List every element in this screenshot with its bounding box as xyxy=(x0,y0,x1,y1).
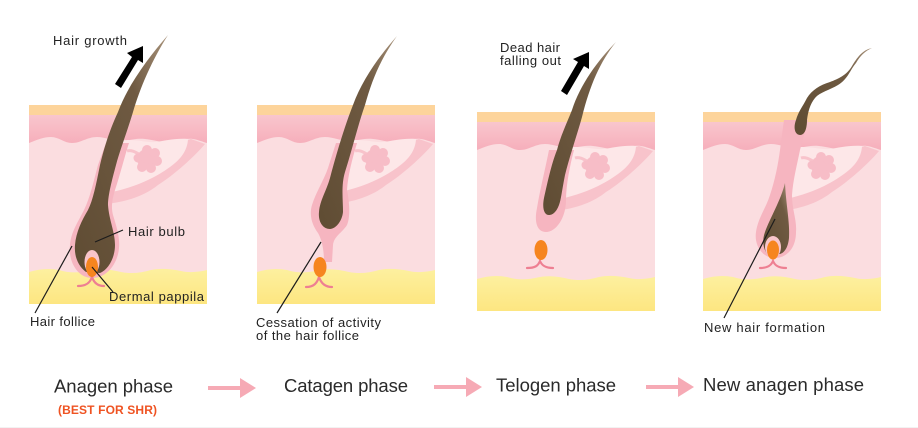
label: dermal pappila: Dermal pappila xyxy=(109,289,205,304)
arrow: anagen to catagen xyxy=(208,378,256,398)
panel: new anagen phase xyxy=(703,48,881,335)
dermal papilla xyxy=(306,257,332,287)
hair shaft and bulb xyxy=(75,35,168,273)
label: cessation of activity xyxy=(256,315,382,343)
heading: new anagen phase: New anagen phase xyxy=(703,374,864,395)
label: dead hair falling out xyxy=(500,40,561,68)
skin cross-section xyxy=(703,112,881,311)
arrow: hair growth xyxy=(115,46,143,88)
note: best for SHR: (BEST FOR SHR) xyxy=(58,403,157,417)
label: hair growth: Hair growth xyxy=(53,33,127,48)
heading: anagen phase: Anagen phase xyxy=(54,376,173,396)
label: hair follice: Hair follice xyxy=(30,314,95,329)
hair follicle sheath xyxy=(70,143,129,278)
label: cessation of activity: of the hair follice xyxy=(256,328,359,343)
label: dead hair falling out: falling out xyxy=(500,53,561,68)
skin cross-section xyxy=(477,112,655,311)
arrow: dead hair falling out xyxy=(561,52,589,95)
dermal papilla xyxy=(760,236,786,268)
shed hair xyxy=(795,48,872,135)
label: cessation of activity: Cessation of activity xyxy=(256,315,382,330)
hair follicle sheath xyxy=(536,150,574,232)
heading: catagen phase: Catagen phase xyxy=(284,375,408,396)
dermal papilla xyxy=(527,240,553,268)
label: hair bulb: Hair bulb xyxy=(128,224,185,239)
label: new hair formation: New hair formation xyxy=(704,320,825,335)
dermal papilla xyxy=(78,250,104,286)
leader lines xyxy=(35,230,123,313)
arrow: catagen to telogen xyxy=(434,377,482,397)
arrow: telogen to new anagen xyxy=(646,377,694,397)
panel: catagen phase xyxy=(256,36,435,343)
leader line xyxy=(724,219,775,318)
panel: telogen phase xyxy=(477,40,655,311)
skin cross-section xyxy=(29,105,207,304)
hair follicle sheath xyxy=(756,120,808,258)
skin cross-section xyxy=(257,105,435,304)
hair shaft and club xyxy=(319,36,397,229)
heading: telogen phase: Telogen phase xyxy=(496,374,616,396)
hair shaft and club xyxy=(543,42,616,215)
label: dead hair falling out: Dead hair xyxy=(500,40,561,55)
hair follicle sheath xyxy=(311,143,357,262)
panel: anagen phase xyxy=(29,33,207,329)
leader line xyxy=(277,242,321,313)
new hair xyxy=(763,183,789,254)
